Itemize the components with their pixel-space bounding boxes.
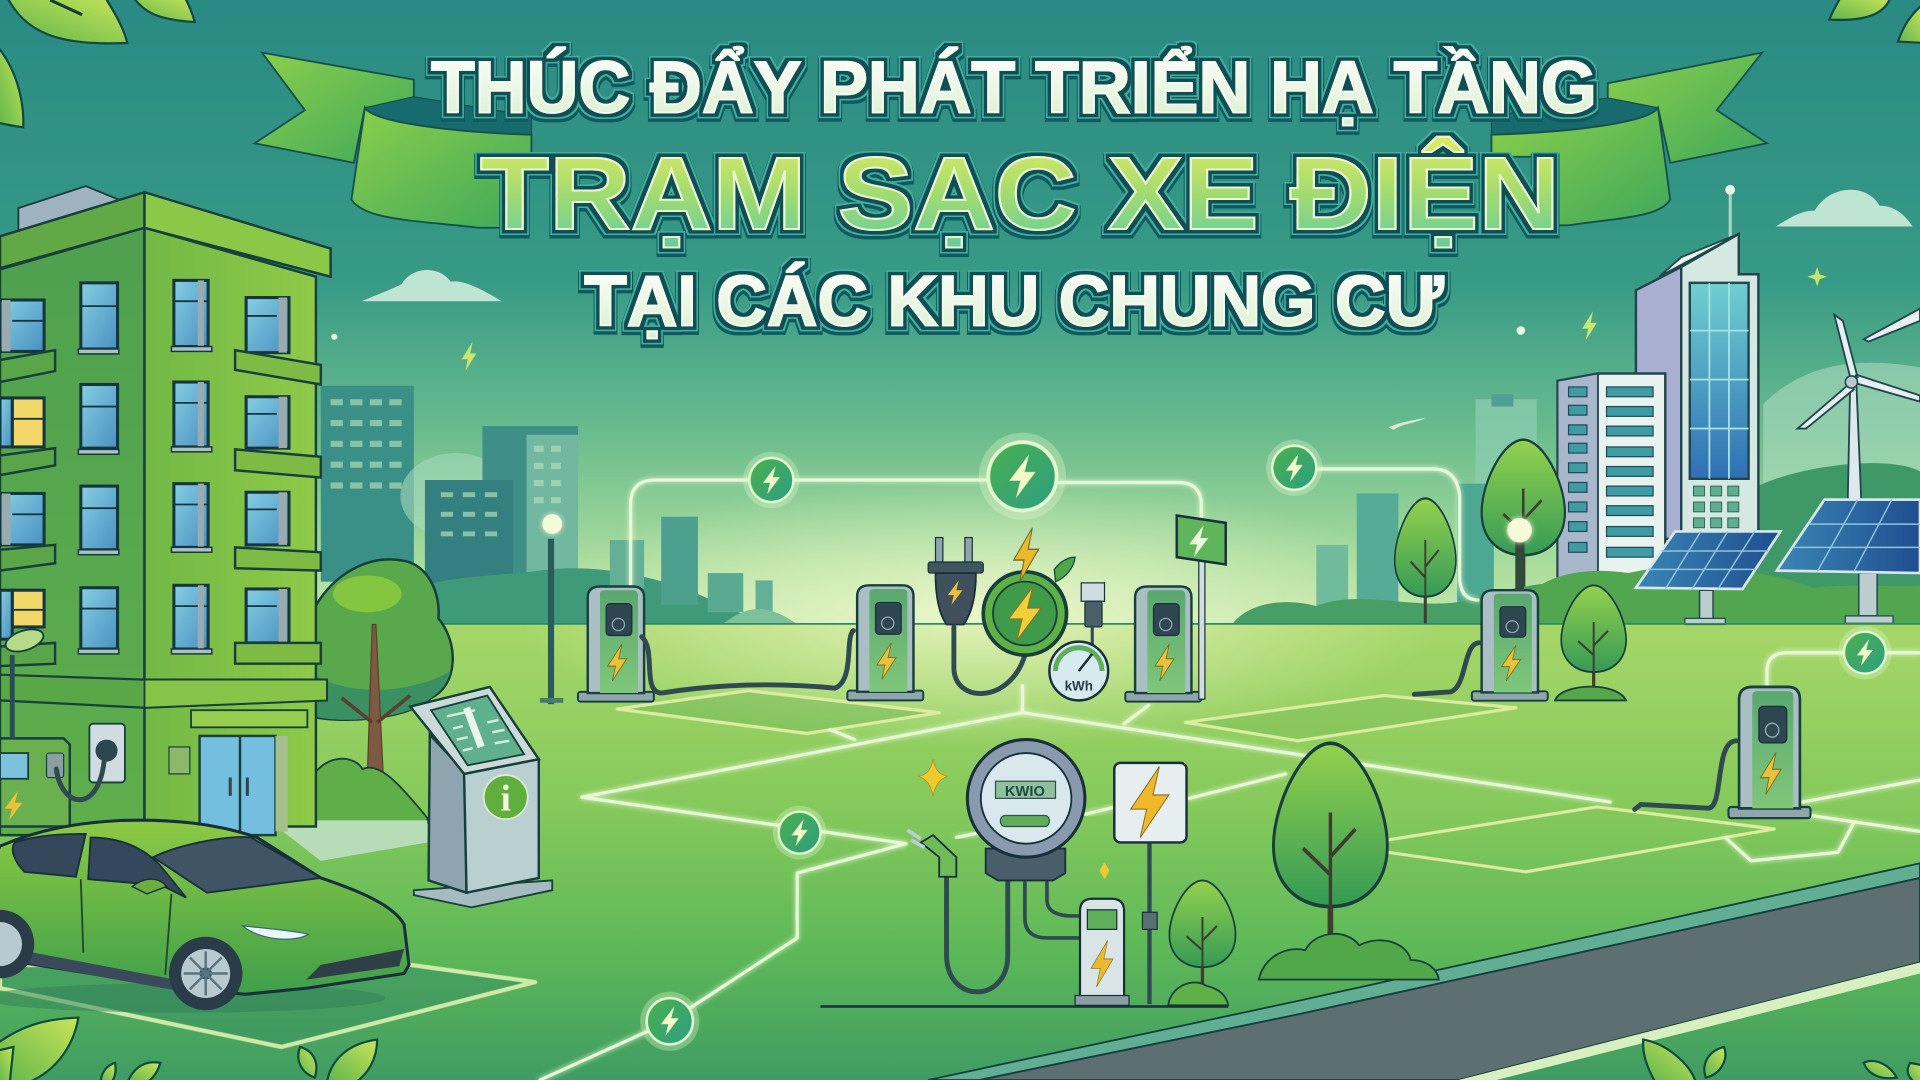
trees bbox=[1168, 440, 1626, 1005]
road bbox=[928, 863, 1920, 1080]
central plug and gauge cluster bbox=[928, 516, 1226, 700]
glass tower bbox=[1636, 185, 1758, 539]
horizon strip bbox=[0, 623, 1920, 625]
bird bbox=[1389, 418, 1427, 430]
top-right leaves bbox=[1829, 0, 1891, 20]
left tree bbox=[272, 559, 453, 861]
bushes bbox=[1555, 687, 1626, 700]
small antenna lights bbox=[331, 326, 1525, 340]
roof box bbox=[18, 186, 119, 239]
info kiosk: i bbox=[501, 778, 511, 819]
floor band bbox=[0, 675, 327, 708]
power plug bbox=[928, 538, 1025, 694]
USB connector bbox=[1081, 583, 1104, 601]
sparkles bbox=[918, 759, 948, 796]
office building bbox=[1558, 373, 1665, 588]
title bbox=[431, 46, 1597, 342]
charging stations bbox=[578, 585, 1810, 818]
kWh gauge bbox=[1049, 642, 1108, 700]
title line 2: TRẠM SẠC XE ĐIỆN bbox=[480, 136, 1560, 251]
canopy and entrance door bbox=[169, 710, 307, 835]
skyline right bbox=[1233, 363, 1920, 623]
central plug and gauge cluster: kWh bbox=[1065, 679, 1093, 694]
balconies bbox=[0, 350, 321, 666]
skyline left bbox=[321, 386, 796, 624]
meter cables bbox=[947, 877, 1008, 992]
top-left leaves bbox=[7, 0, 127, 43]
meter body bbox=[986, 849, 1065, 880]
walls bbox=[0, 228, 144, 835]
smart electricity meter group bbox=[820, 740, 1228, 1007]
clouds bbox=[361, 190, 1913, 301]
horizon glow bbox=[514, 478, 1445, 747]
hedge behind solar panels bbox=[1512, 567, 1920, 623]
windows bbox=[0, 280, 289, 654]
title line 3: TẠI CÁC KHU CHUNG CƯ bbox=[584, 263, 1444, 342]
mini charger bbox=[1080, 899, 1124, 997]
parking bays bbox=[0, 691, 1774, 1047]
sign with bolt bbox=[1199, 557, 1205, 699]
info kiosk bbox=[410, 687, 552, 907]
street lamps bbox=[540, 514, 1532, 704]
charger cables bbox=[642, 631, 853, 693]
apartment building bbox=[0, 186, 331, 835]
green bolt disc bbox=[983, 572, 1067, 655]
wind turbines bbox=[1798, 309, 1920, 500]
sky background bbox=[0, 0, 1920, 624]
solar panels bbox=[1636, 500, 1920, 624]
energy network nodes bbox=[640, 433, 1892, 1051]
title ribbon bbox=[255, 53, 1767, 228]
sparkling bolts in sky bbox=[462, 267, 1827, 371]
parked electric car bbox=[0, 820, 409, 1013]
energy network lines bbox=[540, 469, 1920, 1080]
wall socket and charger at building bbox=[0, 625, 125, 827]
car windows bbox=[13, 834, 86, 877]
plug connector bbox=[921, 835, 956, 877]
roof slab bbox=[0, 192, 144, 268]
bolt sign bbox=[1147, 842, 1152, 1004]
bottom-right leaves bbox=[1643, 1040, 1696, 1080]
bottom-left leaves bbox=[0, 1018, 78, 1080]
title line 1: THÚC ĐẨY PHÁT TRIỂN HẠ TẦNG bbox=[431, 46, 1597, 129]
door sill bbox=[21, 950, 178, 991]
ground lawn bbox=[0, 623, 1920, 1080]
smart electricity meter group: KWIO bbox=[1005, 784, 1045, 800]
